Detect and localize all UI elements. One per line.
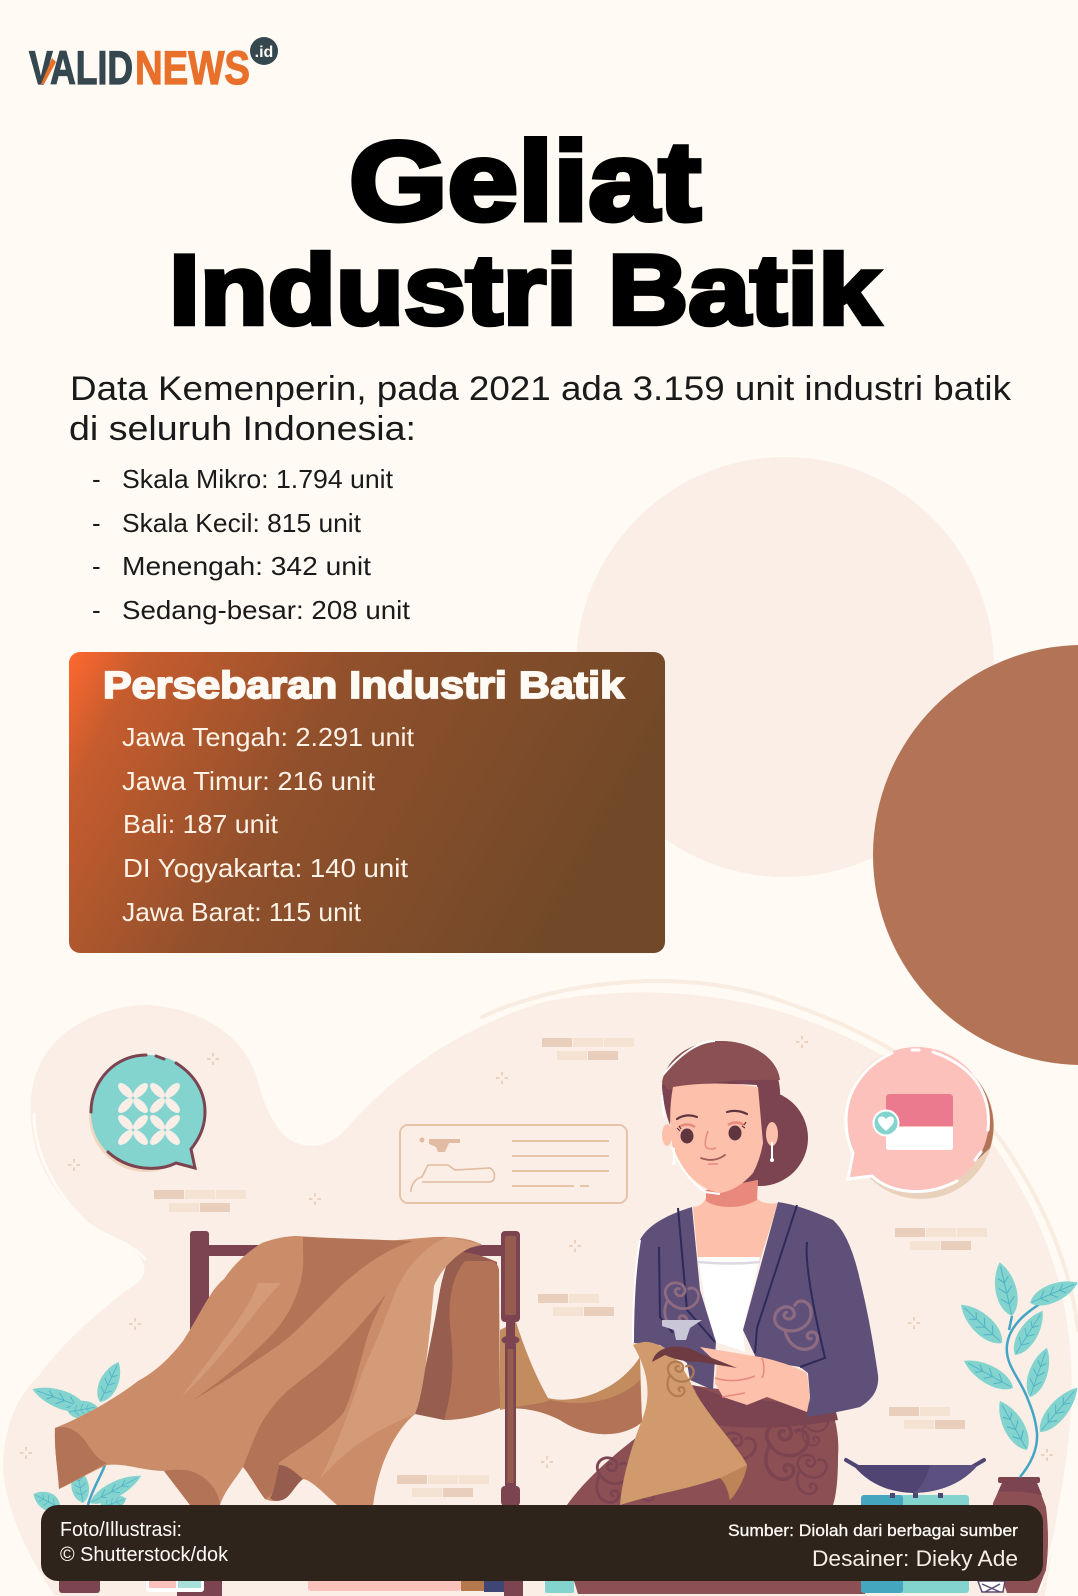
clay pot: [978, 1477, 1048, 1593]
list: skala industri: Sedang-besar: 208 unit: [122, 595, 411, 625]
logo: NEWS: [135, 41, 250, 94]
list: skala industri: [92, 464, 411, 625]
woman: [567, 1041, 878, 1594]
canting tool: [652, 1347, 737, 1368]
background blob: [3, 992, 1072, 1596]
panel: persebaran industri batik: Persebaran Industri Batik: [103, 665, 625, 707]
footer bar: [41, 1505, 1043, 1581]
footer bar: Sumber: Diolah dari berbagai sumber: [728, 1521, 1018, 1540]
logo: [29, 37, 278, 94]
ears: [662, 1122, 778, 1146]
list: skala industri: Skala Kecil: 815 unit: [122, 508, 362, 538]
cloth trailing to lap: [500, 1322, 642, 1434]
cardigan: [633, 1202, 878, 1417]
list: skala industri: -: [92, 508, 101, 538]
title: Industri Batik: [169, 234, 881, 345]
lap cloth: [620, 1342, 747, 1505]
list: skala industri: -: [92, 595, 101, 625]
table frame: [190, 1231, 520, 1506]
list: skala industri: Menengah: 342 unit: [122, 551, 372, 581]
hair: [662, 1041, 780, 1140]
panel: persebaran industri batik: DI Yogyakarta: 140 unit: [123, 853, 409, 883]
panel: persebaran industri batik: [69, 652, 665, 953]
kebaya blouse: [698, 1257, 760, 1390]
objects under footer: [59, 1578, 574, 1596]
wall bricks: [154, 1038, 987, 1497]
hands: [700, 1347, 810, 1412]
panel: persebaran industri batik: Jawa Timur: 216 unit: [122, 766, 376, 796]
intro text: Data Kemenperin, pada 2021 ada 3.159 unit industri batik: [70, 370, 1012, 408]
logo: VALID: [29, 41, 133, 94]
plant: right: [954, 1260, 1078, 1477]
intro text: di seluruh Indonesia:: [69, 410, 416, 448]
chest and neck: [693, 1180, 778, 1260]
footer bar: Foto/Illustrasi:: [60, 1519, 182, 1541]
panel: persebaran industri batik: Jawa Barat: 115 unit: [122, 897, 362, 927]
list: skala industri: -: [92, 551, 101, 581]
list: skala industri: -: [92, 464, 101, 494]
list: skala industri: Skala Mikro: 1.794 unit: [122, 464, 394, 494]
cloth draped on frame: [55, 1236, 500, 1505]
panel: persebaran industri batik: Bali: 187 unit: [123, 809, 279, 839]
wok on stove: [846, 1460, 984, 1593]
icon: pink speech bubble with Indonesian flag: [845, 1047, 994, 1199]
title: Geliat: [349, 119, 701, 244]
hair bun: [712, 1090, 808, 1186]
intro text: [69, 370, 1012, 448]
plant: left: [29, 1358, 145, 1516]
icon: info card with canting: [400, 1125, 627, 1203]
wall sparkles: [20, 1036, 1053, 1468]
face: [670, 1084, 763, 1193]
background circle: light: [576, 457, 994, 877]
panel: persebaran industri batik: Jawa Tengah: 2.291 unit: [122, 722, 415, 752]
skirt: [567, 1385, 868, 1594]
background circle: brown: [873, 645, 1078, 1065]
footer bar: Desainer: Dieky Ade: [812, 1546, 1018, 1571]
footer bar: © Shutterstock/dok: [60, 1544, 229, 1566]
title: [169, 119, 881, 345]
logo: .id: [255, 44, 273, 61]
icon: teal speech bubble with batik pattern: [89, 1055, 205, 1172]
eyes and brows: [662, 1041, 774, 1194]
decorative outline strokes: [34, 981, 1078, 1590]
